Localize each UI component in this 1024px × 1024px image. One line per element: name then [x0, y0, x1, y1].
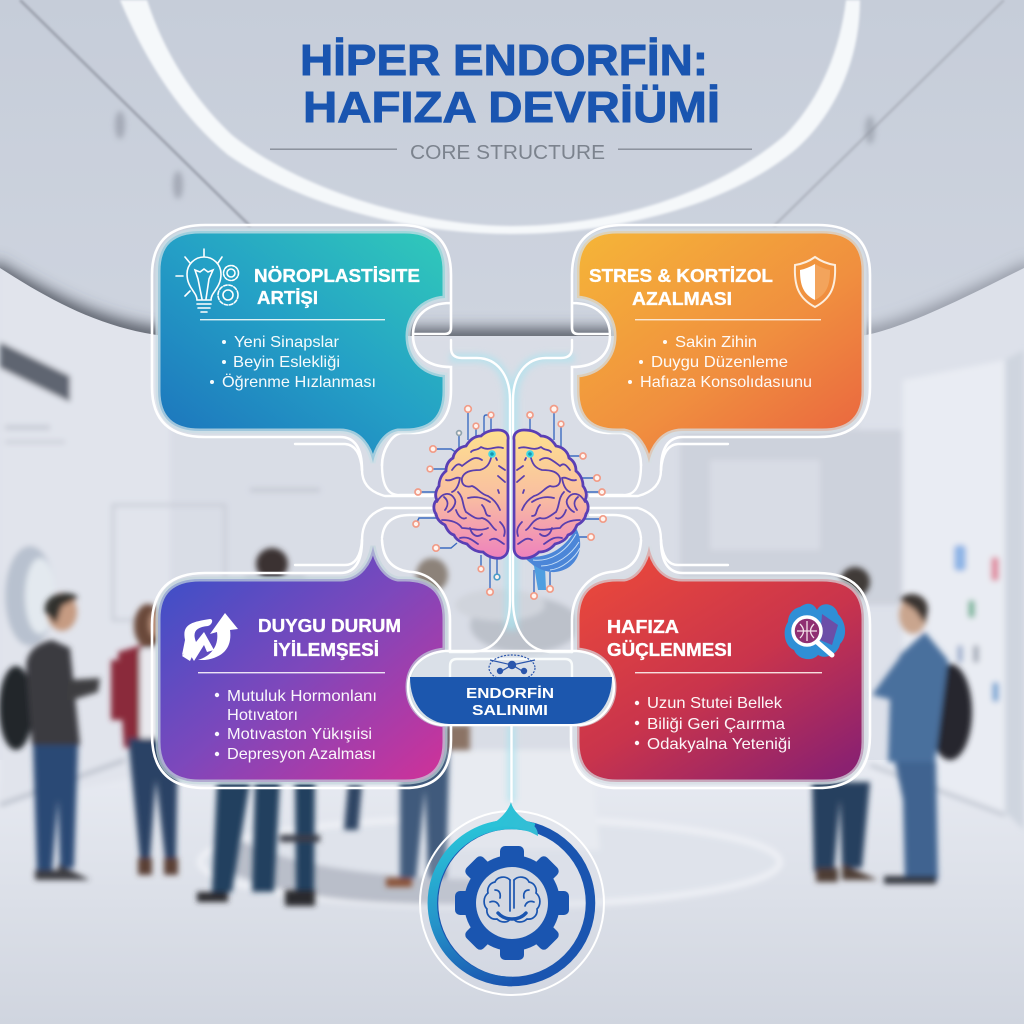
left hemisphere — [434, 430, 508, 558]
heading — [254, 265, 420, 308]
bullet list — [215, 688, 377, 763]
title: HİPER ENDORFİN: — [300, 36, 708, 85]
bullet list: Beyin Eslekliği — [233, 354, 340, 371]
heading: GÜÇLENMESI — [607, 639, 732, 660]
right hemisphere — [514, 430, 588, 558]
panel: mood improvement — [152, 540, 451, 788]
icon: brain under magnifier — [785, 604, 845, 659]
heading — [607, 616, 732, 660]
panel: memory strengthening — [571, 540, 870, 788]
heading: İYİLEMŞESİ — [273, 639, 379, 660]
icon: smiling brain — [484, 877, 540, 922]
pill: endorphin release — [408, 651, 614, 725]
bullet list — [210, 334, 376, 391]
bullet list: Mutuluk Hormonlanı — [227, 688, 377, 705]
connector lines linking panels to the brain — [295, 340, 728, 802]
label: ENDORFİN — [466, 685, 554, 702]
bullet list: Uzun Stutei Bellek — [647, 695, 783, 712]
title: HAFIZA DEVRİÜMİ — [303, 83, 720, 132]
central brain illustration — [413, 406, 606, 599]
bullet list: Sakin Zihin — [675, 334, 757, 351]
heading — [589, 265, 773, 309]
bullet list: Depresyon Azalması — [227, 746, 376, 763]
active neuron nodes — [489, 451, 533, 457]
icon: shield — [795, 257, 835, 307]
bottom badge: gear with brain — [420, 802, 604, 995]
icon: light bulb with gears — [176, 249, 238, 312]
bullet list: Hafıaza Konsolıdasıunu — [640, 374, 812, 391]
heading: NÖROPLASTİSITE — [254, 265, 420, 286]
bullet list — [635, 695, 791, 753]
bullet list: Motıvaston Yükışıisi — [227, 726, 372, 743]
panel: neuroplasticity — [152, 225, 451, 470]
heading: ARTİŞI — [257, 287, 318, 308]
heading: DUYGU DURUM — [258, 615, 401, 636]
heading — [258, 615, 401, 660]
label — [466, 685, 554, 719]
cerebellum and brain stem — [523, 528, 580, 590]
heading: STRES & KORTİZOL — [589, 265, 773, 286]
heading: HAFIZA — [607, 616, 679, 637]
heading: AZALMASI — [632, 288, 732, 309]
bullet list: Hotıvatorı — [227, 707, 298, 724]
bullet list: Yeni Sinapslar — [234, 334, 340, 351]
icon: rising arrows — [182, 613, 238, 661]
icon: endorphin molecule — [489, 655, 535, 681]
background people — [0, 548, 972, 906]
neural connector nodes — [413, 406, 606, 599]
icon: gear — [455, 846, 569, 960]
title — [300, 36, 720, 132]
panel: stress and cortisol — [572, 225, 870, 470]
bullet list: Odakyalna Yeteniği — [647, 736, 791, 753]
bullet list: Biliği Geri Çaırrma — [647, 716, 785, 733]
subtitle: CORE STRUCTURE — [410, 142, 605, 164]
bullet list: Duygu Düzenleme — [651, 354, 788, 371]
bullet list: Öğrenme Hızlanması — [222, 373, 376, 391]
bullet list — [628, 334, 812, 391]
label: SALINIMI — [472, 702, 548, 719]
